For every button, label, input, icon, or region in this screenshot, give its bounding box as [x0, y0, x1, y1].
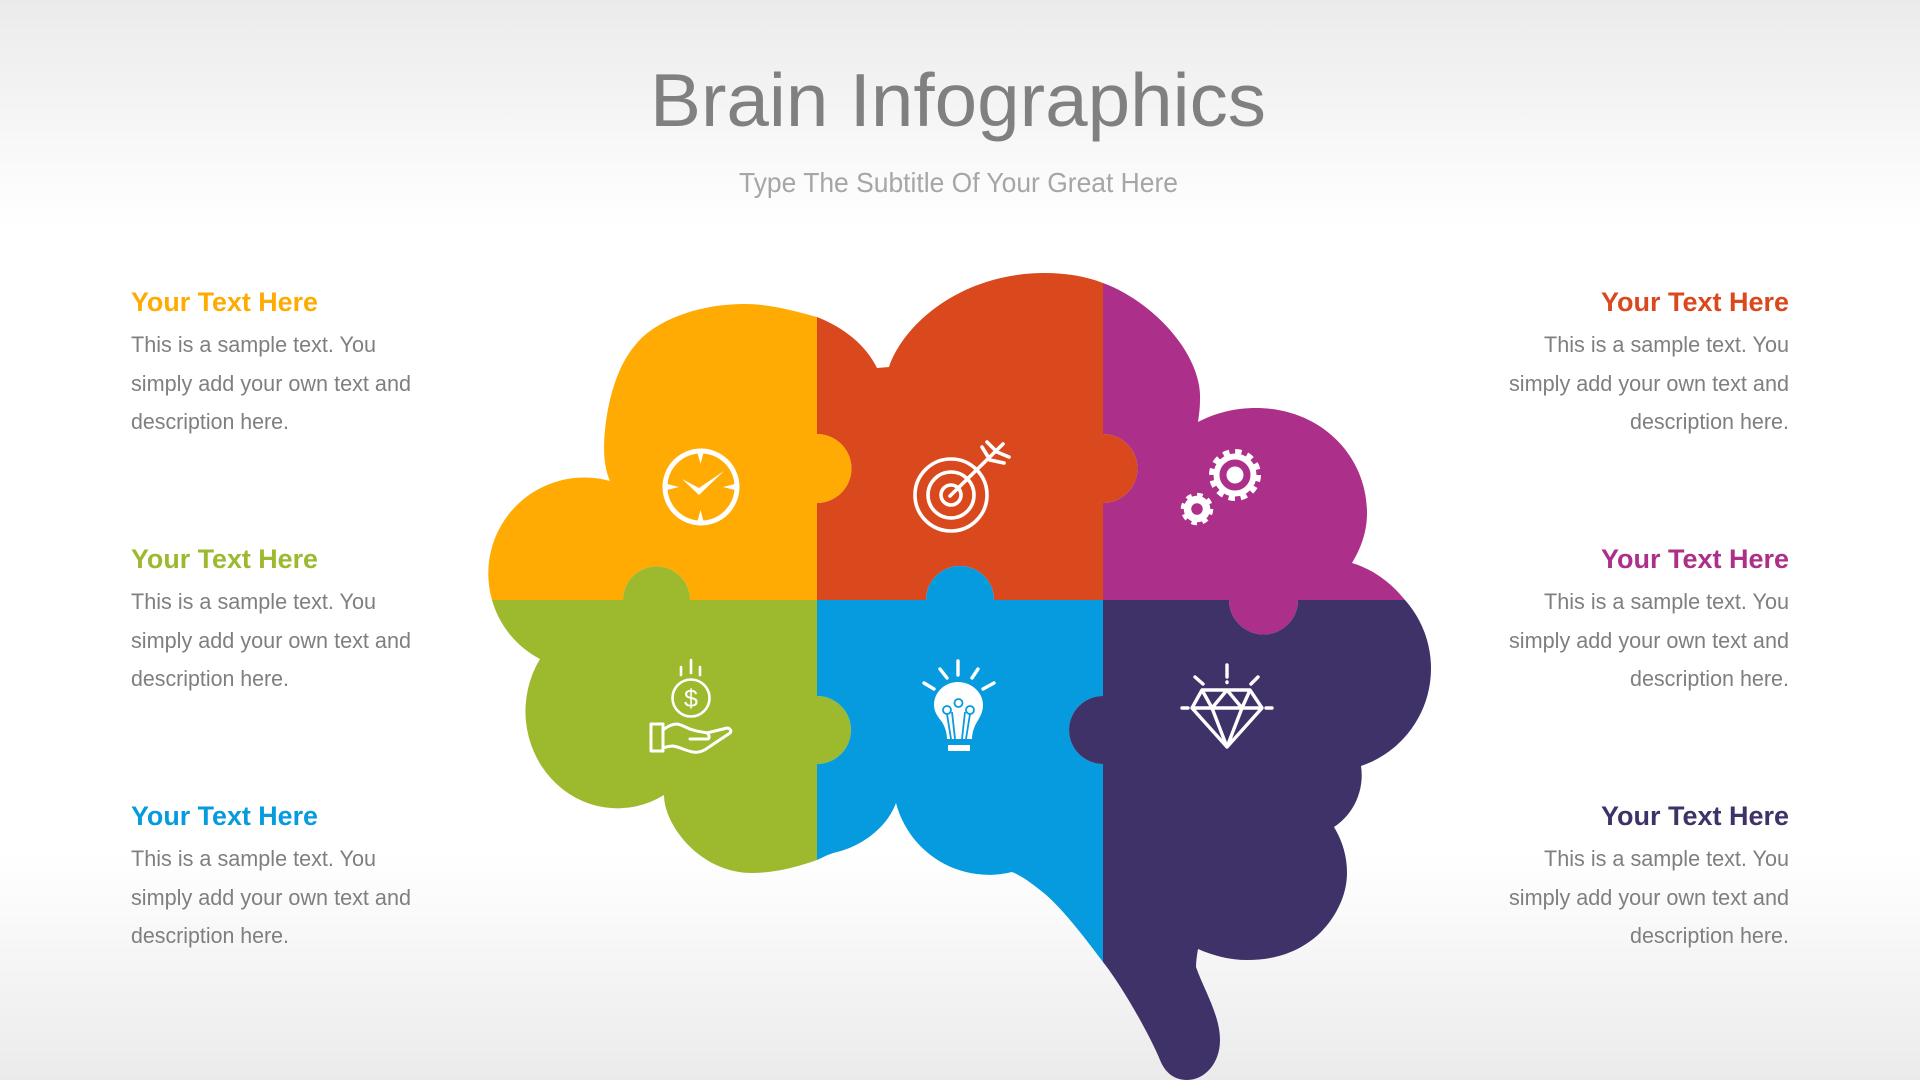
puzzle piece: purple [1103, 283, 1405, 634]
body text: simply add your own text and [131, 885, 411, 910]
body text: description here. [131, 409, 289, 434]
subtitle: Type The Subtitle Of Your Great Here [739, 167, 1178, 198]
body text: description here. [1630, 666, 1789, 691]
body text: description here. [131, 923, 289, 948]
body text [131, 846, 411, 948]
puzzle piece: blue [817, 566, 1103, 962]
hand [651, 724, 731, 752]
panel: right text 2 [1509, 544, 1789, 691]
body text [1509, 846, 1789, 948]
icon: hand with coin [651, 660, 731, 752]
body text: simply add your own text and [131, 371, 411, 396]
panel: left text 1 [131, 287, 411, 434]
body text: This is a sample text. You [131, 846, 376, 871]
panel: left text 2 [131, 544, 411, 691]
body text [131, 332, 411, 434]
body text: description here. [1630, 409, 1789, 434]
heading: Your Text Here [1601, 544, 1789, 574]
puzzle piece: red [817, 273, 1138, 600]
body text: simply add your own text and [1509, 628, 1789, 653]
heading: Your Text Here [1601, 801, 1789, 831]
body text: simply add your own text and [131, 628, 411, 653]
heading: Your Text Here [131, 544, 318, 574]
body text: This is a sample text. You [1544, 332, 1789, 357]
brain puzzle [488, 273, 1431, 1080]
icon: clock [665, 451, 737, 523]
icon: target with arrow [915, 442, 1009, 531]
icon: diamond [1182, 665, 1272, 747]
body text: description here. [131, 666, 289, 691]
body text: This is a sample text. You [131, 332, 376, 357]
panel: right text 3 [1509, 801, 1789, 948]
coin [672, 680, 710, 716]
filament [943, 699, 974, 739]
body text: simply add your own text and [1509, 371, 1789, 396]
body text: This is a sample text. You [1544, 589, 1789, 614]
body text: This is a sample text. You [1544, 846, 1789, 871]
title: Brain Infographics [650, 58, 1266, 142]
puzzle piece: orange [488, 304, 852, 600]
heading: Your Text Here [131, 801, 318, 831]
heading: Your Text Here [131, 287, 318, 317]
body text: description here. [1630, 923, 1789, 948]
heading: Your Text Here [1601, 287, 1789, 317]
puzzle piece: dark purple [1069, 600, 1431, 1080]
panel: right text 1 [1509, 287, 1789, 434]
body text [131, 589, 411, 691]
small gear [1182, 494, 1212, 524]
large gear [1212, 452, 1258, 498]
body text [1509, 589, 1789, 691]
body text: simply add your own text and [1509, 885, 1789, 910]
panel: left text 3 [131, 801, 411, 948]
icon: light bulb [924, 661, 994, 751]
body text: This is a sample text. You [131, 589, 376, 614]
icon: gears [1182, 452, 1258, 524]
body text [1509, 332, 1789, 434]
icon: hand with coin: $ [684, 685, 698, 713]
puzzle piece: green [492, 566, 851, 873]
